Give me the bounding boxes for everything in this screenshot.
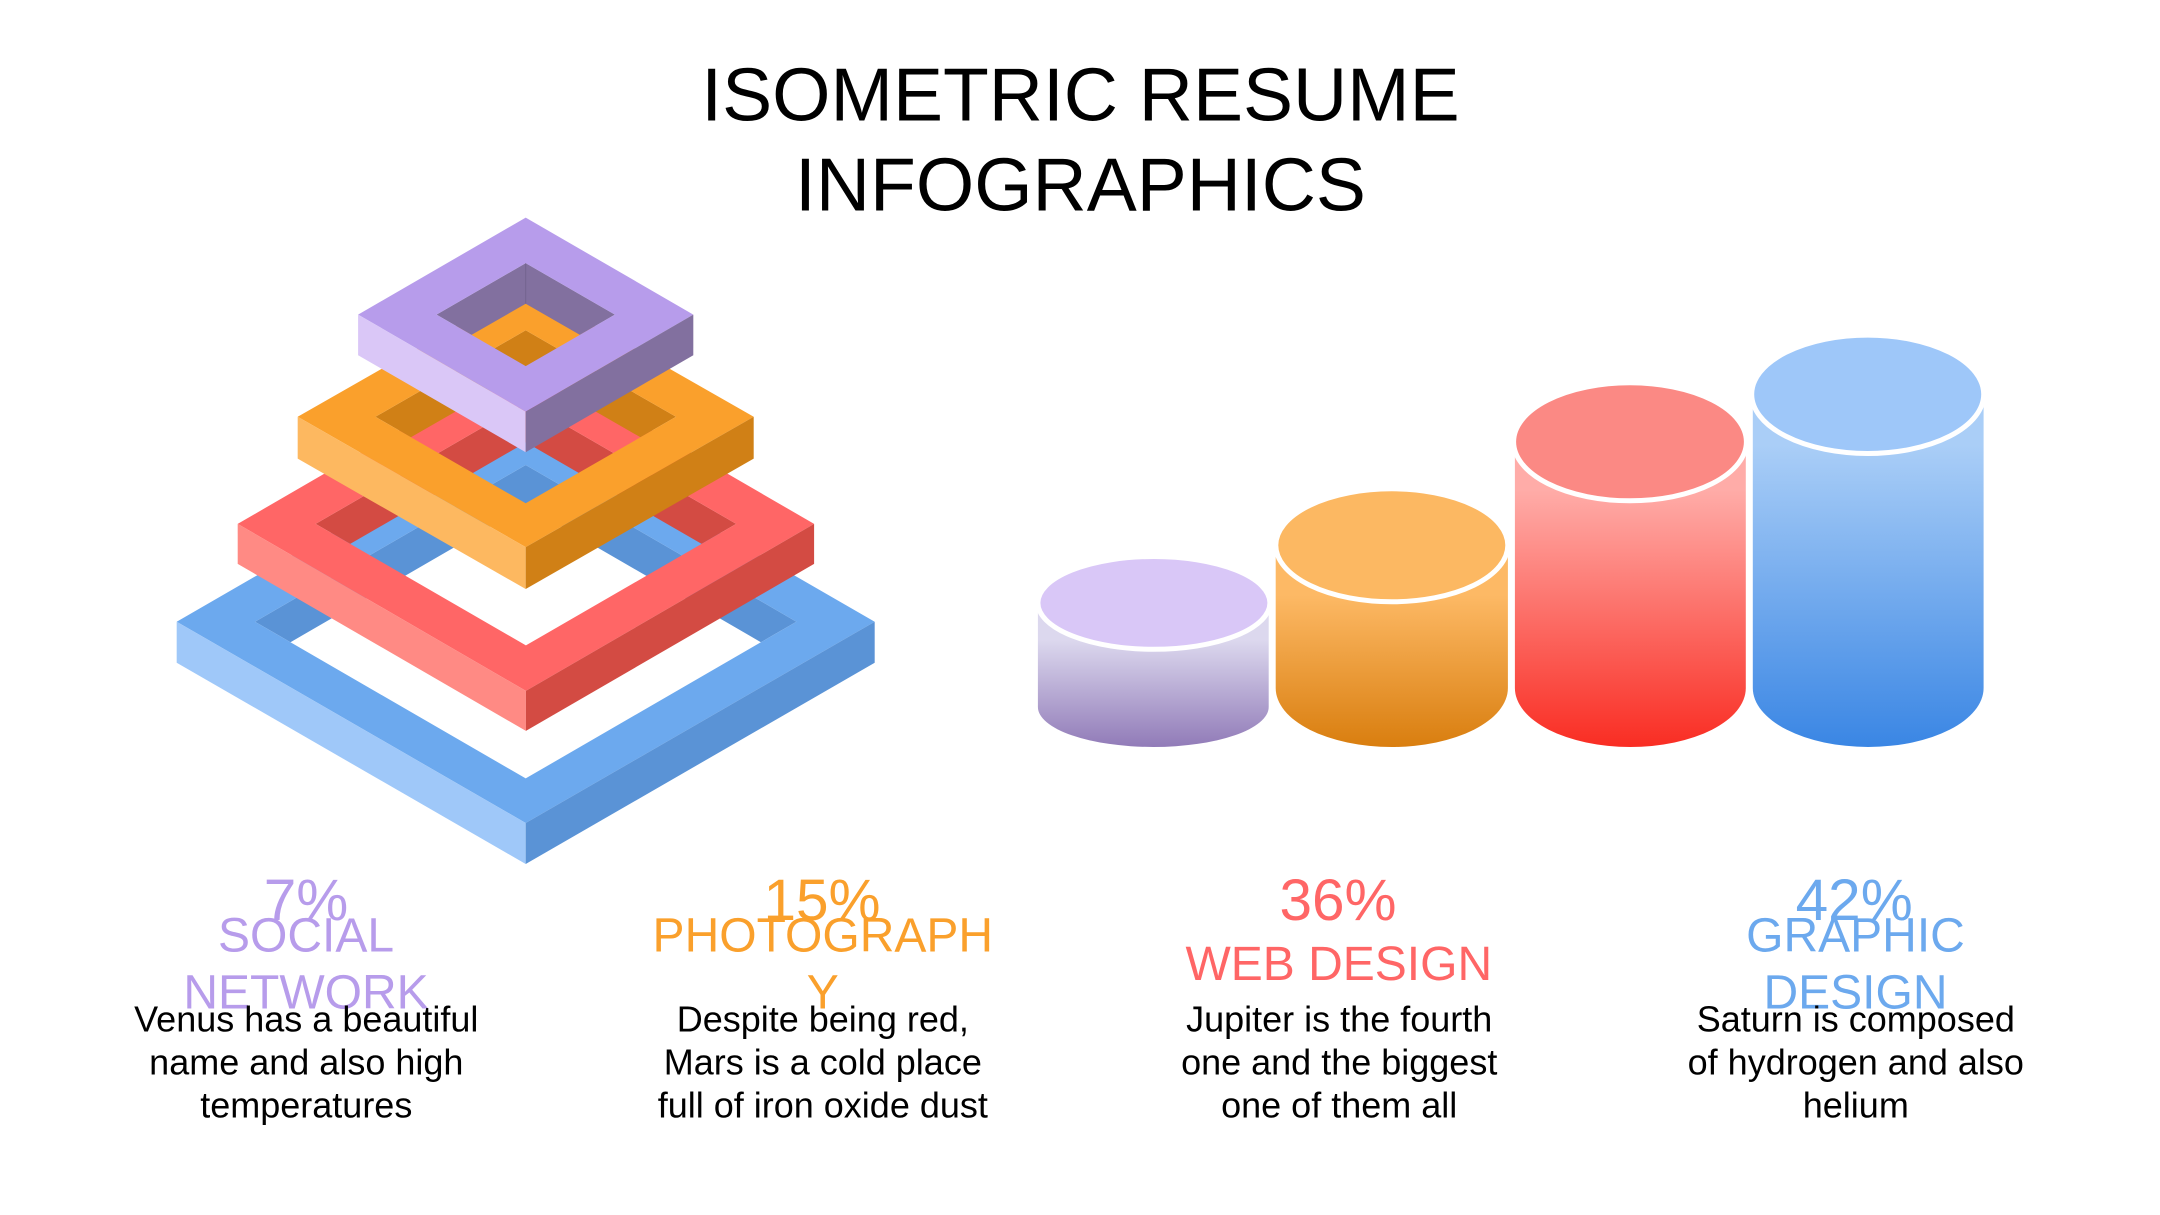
description: saturn: Saturn is composed [1697,999,2015,1040]
description: venus [134,999,478,1126]
ring: purple layer [358,218,693,452]
description: saturn [1688,999,2024,1126]
title [701,52,1460,226]
percentage: 7%: 7% [264,868,348,933]
description: venus: temperatures [200,1085,412,1126]
label: web design: WEB DESIGN [1185,938,1492,991]
ring: red layer [238,357,814,731]
label: photography: PHOTOGRAPH [653,910,993,963]
title: ISOMETRIC RESUME [701,52,1460,136]
label: social network: SOCIAL [218,910,394,963]
label: graphic design [1746,910,1965,1019]
label: social network [183,910,429,1019]
ring: orange layer [298,286,754,589]
description: venus: Venus has a beautiful [134,999,478,1040]
column: social network [134,868,478,1126]
description: saturn: of hydrogen and also [1688,1042,2024,1083]
cylinder: orange 15% [1276,489,1508,747]
description: jupiter: one of them all [1221,1085,1457,1126]
description: jupiter: one and the biggest [1181,1042,1497,1083]
label: graphic design: GRAPHIC [1746,910,1965,963]
column: web design [1181,868,1497,1126]
label: photography: Y [807,966,839,1019]
ring: blue layer [177,420,875,864]
description: jupiter: Jupiter is the fourth [1186,999,1492,1040]
column: graphic design [1688,868,2024,1126]
description: mars: Despite being red, [677,999,969,1040]
percentage: 42%: 42% [1796,868,1913,933]
description: venus: name and also high [149,1042,463,1083]
description: mars [658,999,988,1126]
description: mars: Mars is a cold place [664,1042,982,1083]
label: photography [653,910,993,1019]
description: mars: full of iron oxide dust [658,1085,988,1126]
cylinder bar chart [1038,335,1984,747]
column: photography [653,868,993,1126]
label: graphic design: DESIGN [1763,966,1948,1019]
description: saturn: helium [1803,1085,1909,1126]
cylinder: purple 7% [1038,556,1270,747]
cylinder: red 36% [1514,383,1746,747]
percentage: 15%: 15% [763,868,881,933]
percentage: 36%: 36% [1279,868,1397,933]
isometric stacked rings chart [177,218,875,864]
label: social network: NETWORK [183,966,429,1019]
title: INFOGRAPHICS [795,142,1366,226]
cylinder: blue 42% [1752,335,1984,747]
description: jupiter [1181,999,1497,1126]
